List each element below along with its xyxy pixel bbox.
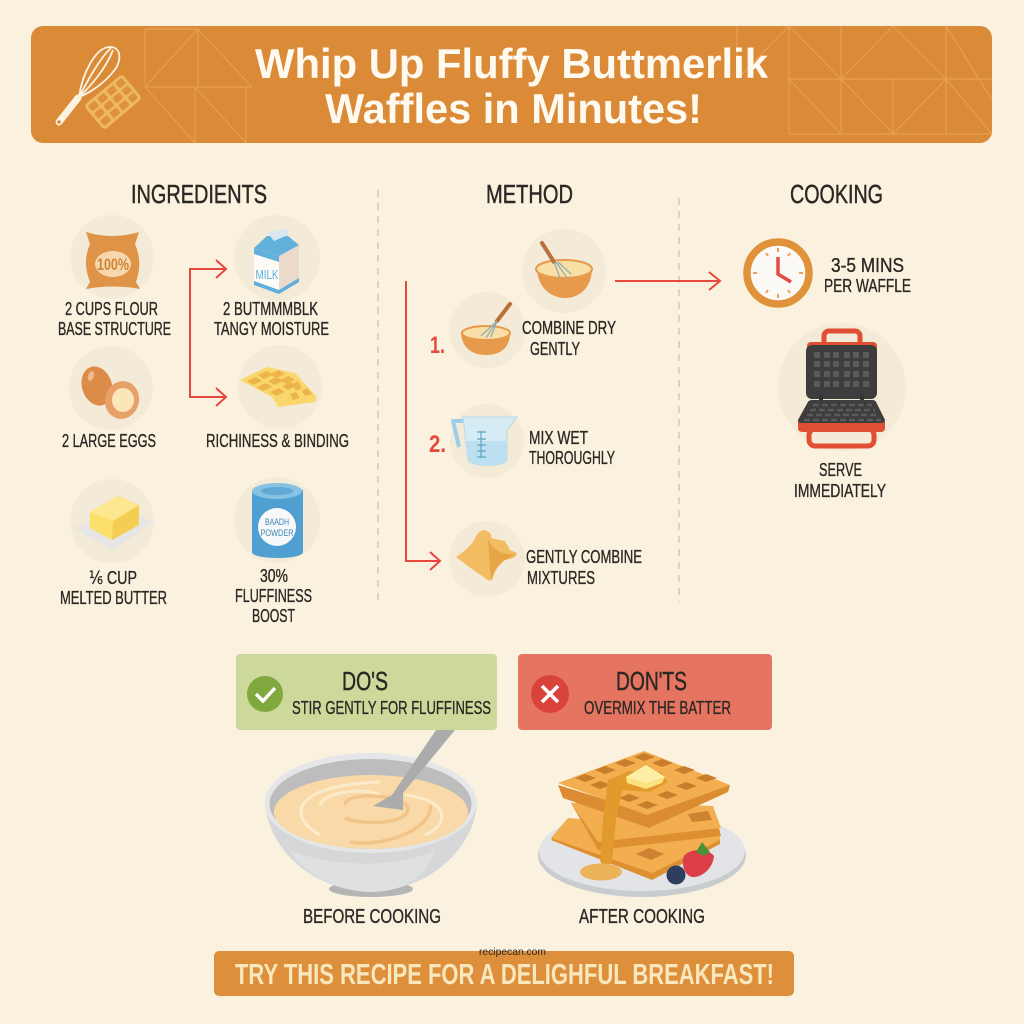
buttermilk label [214,298,329,339]
icon: check [247,676,283,712]
icon: baking powder can: BAADH [265,517,289,527]
panel: don'ts [518,654,772,730]
icon: cross [531,675,569,713]
step 2 label: THOROUGHLY [529,447,615,468]
serve label: SERVE [819,459,862,480]
top waffle [558,751,730,828]
icon: flour sack: 100% [97,255,129,274]
eggs label: 2 LARGE EGGS [62,430,156,451]
step 2 label: MIX WET [529,427,588,448]
icon: combined dough [449,521,525,597]
panel: cooking [747,242,911,501]
don'ts heading: DON'TS [616,666,687,696]
banner title text [255,40,769,132]
baking powder label: BOOST [252,605,295,626]
buttermilk label: TANGY MOISTURE [214,318,329,339]
label: before cooking: BEFORE COOKING [303,906,441,928]
do's text: STIR GENTLY FOR FLUFFINESS [292,697,491,718]
cook time label: PER WAFFLE [824,275,911,296]
call to action banner: TRY THIS RECIPE FOR A DELIGHFUL BREAKFAST! [235,959,774,991]
icon: mixing bowl top [522,229,606,313]
icon: clock [747,242,809,304]
call to action banner [214,951,794,996]
syrup [600,771,668,866]
banner title text: Waffles in Minutes! [325,85,702,132]
column dividers [378,190,679,602]
step 1 label [522,317,616,359]
flour label: BASE STRUCTURE [58,318,171,339]
icon: measuring jug [450,404,524,478]
butter label [60,567,167,608]
arrow: to cooking [615,272,720,290]
bottom waffle [551,818,720,880]
icon: flour sack [70,215,154,299]
baking powder label: FLUFFINESS [235,585,312,606]
heading: method: METHOD [486,179,573,209]
cook time label [824,255,911,296]
butter label: ⅙ CUP [89,567,137,588]
heading: ingredients: INGREDIENTS [131,179,267,209]
icon: butter on dish [70,479,154,563]
icon: mixing bowl step 1 [449,292,525,368]
panel: do's [236,654,497,730]
step 3 label: GENTLY COMBINE [526,546,642,567]
middle waffle [571,803,721,850]
step number 2: 2. [429,431,446,458]
icon: eggs [69,346,153,430]
banner title text: Whip Up Fluffy Buttmerlik [255,40,769,87]
heading: cooking: COOKING [790,179,883,209]
icon: baking powder can [234,477,320,563]
step 2 label [529,427,615,468]
richness label: RICHINESS & BINDING [206,430,349,451]
do's heading: DO'S [342,666,388,696]
flour label: 2 CUPS FLOUR [65,298,158,319]
step 1 label: COMBINE DRY [522,317,616,338]
serve label: IMMEDIATELY [794,480,886,501]
icon: waffle iron [778,323,906,451]
berries [683,850,714,877]
icon: waffle pieces [238,345,322,429]
source credit: recipecan.com [479,947,546,958]
panel: method [406,229,720,597]
arrow: method flow down [406,281,440,570]
illustration: waffle stack [538,751,746,897]
butter label: MELTED BUTTER [60,587,167,608]
panel: ingredients [58,215,349,626]
buttermilk label: 2 BUTMMMBLK [223,298,318,319]
arrow: ingredients branch [190,260,226,406]
icon: milk carton [234,215,320,301]
title banner [31,26,992,143]
icon: milk carton: MILK [256,267,279,282]
flour label [58,298,171,339]
step 1 label: GENTLY [530,338,580,359]
cook time label: 3-5 MINS [831,255,904,277]
illustration: batter bowl [264,730,477,897]
step 3 label [526,546,642,588]
icon: whisk and waffle [57,47,142,130]
baking powder label [235,565,312,626]
label: after cooking: AFTER COOKING [579,906,705,928]
step 3 label: MIXTURES [527,567,595,588]
step number 1: 1. [430,332,445,359]
serve label [794,459,886,501]
baking powder label: 30% [260,565,288,586]
don'ts text: OVERMIX THE BATTER [584,697,731,718]
icon: baking powder can: POWDER [260,528,294,538]
